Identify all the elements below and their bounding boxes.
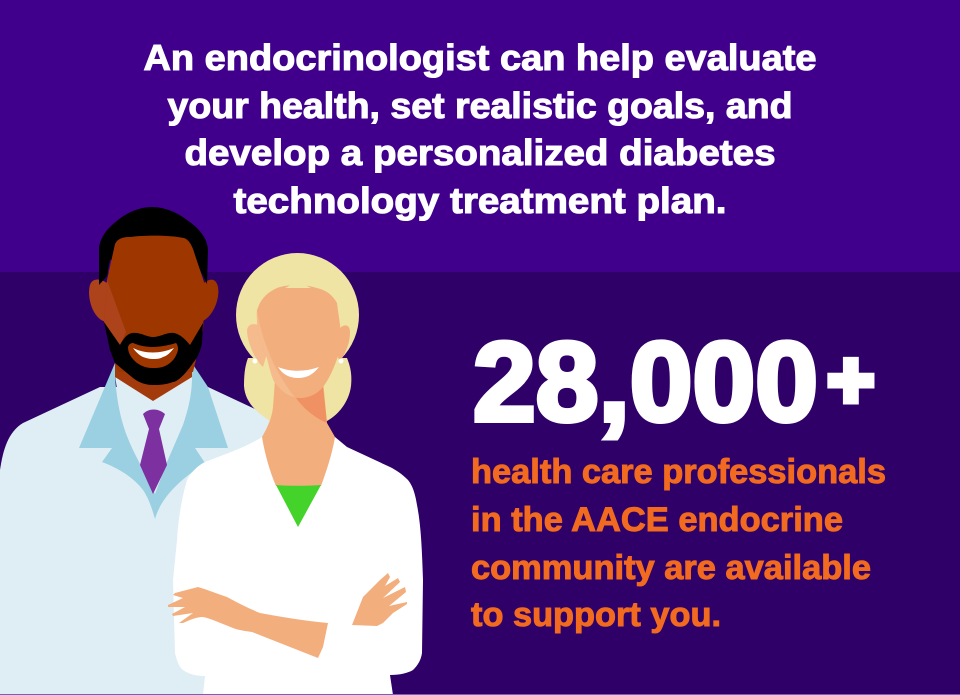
statistic description: to support you. xyxy=(471,596,721,634)
heading: your health, set realistic goals, and xyxy=(168,85,793,126)
statistic description: health care professionals xyxy=(471,453,886,491)
right hand xyxy=(352,573,407,626)
coat xyxy=(0,387,272,695)
panel: top background xyxy=(0,0,960,272)
upper hair xyxy=(236,253,359,377)
statistic description xyxy=(471,453,886,634)
left ear xyxy=(247,324,268,367)
face shadow xyxy=(104,280,126,346)
neck xyxy=(115,355,192,401)
right ear xyxy=(203,280,218,321)
left arm and hand xyxy=(168,587,328,658)
hair parting xyxy=(285,273,311,288)
coat xyxy=(173,437,423,695)
top green xyxy=(276,485,321,527)
heading: technology treatment plan. xyxy=(234,180,726,221)
statistic: 28,000+: + xyxy=(828,336,874,425)
heading xyxy=(144,37,816,221)
statistic description: community are available xyxy=(471,549,871,587)
hair xyxy=(99,207,208,285)
face xyxy=(104,236,205,372)
smile xyxy=(133,348,174,359)
neck shadow xyxy=(296,387,327,423)
statistic description: in the AACE endocrine xyxy=(471,501,843,539)
lower hair xyxy=(244,358,351,421)
beard xyxy=(104,322,203,385)
bottom edge line xyxy=(0,694,960,695)
panel: bottom background xyxy=(0,272,960,695)
heading: An endocrinologist can help evaluate xyxy=(144,37,816,78)
lapels xyxy=(79,363,228,519)
right ear xyxy=(335,325,350,362)
illustration: male doctor xyxy=(0,207,272,695)
left ear xyxy=(89,279,108,322)
earrings xyxy=(252,358,258,364)
illustration: female doctor xyxy=(168,253,423,695)
mouth xyxy=(128,343,178,368)
face highlight xyxy=(257,310,295,397)
smile xyxy=(278,367,319,378)
tie xyxy=(140,410,167,494)
statistic: 28,000+: 28,000 xyxy=(473,320,818,444)
face xyxy=(257,285,341,398)
neck xyxy=(262,380,335,486)
heading: develop a personalized diabetes xyxy=(184,132,776,173)
shirt xyxy=(115,376,192,500)
